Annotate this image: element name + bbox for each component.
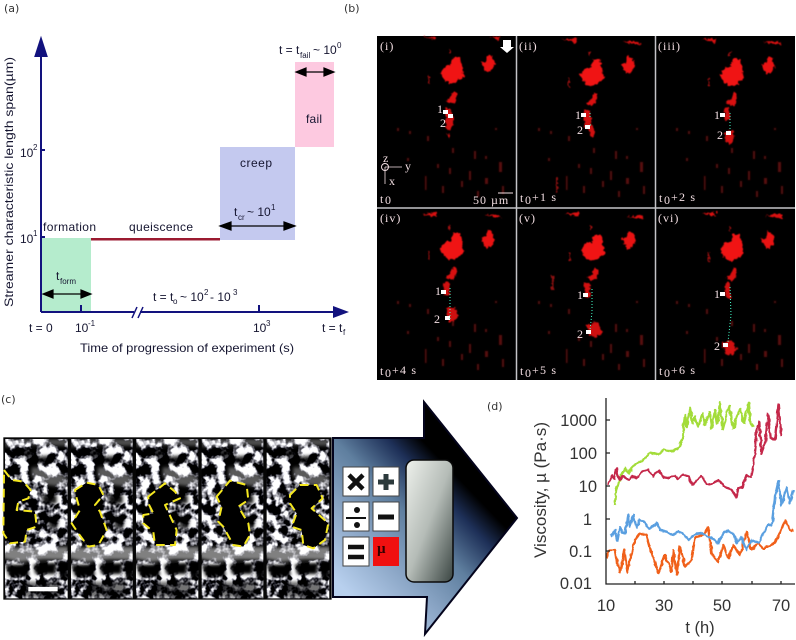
calculator display xyxy=(406,460,453,582)
span arrow: t form xyxy=(43,290,91,298)
frame iii: 2 xyxy=(717,128,723,142)
x tick labels: 3 xyxy=(266,319,271,328)
frame iv xyxy=(380,211,504,380)
y tick labels: 0.1 xyxy=(569,543,592,561)
panel: (a) streamer progression diagram xyxy=(2,2,349,355)
x tick labels: 30 xyxy=(655,597,673,615)
y tick labels: 0.01 xyxy=(560,575,592,593)
x tick labels: 10 xyxy=(253,321,267,335)
frame ii: +1 s xyxy=(532,190,557,204)
span arrow: t fail xyxy=(296,68,334,76)
x tick labels: 10 xyxy=(597,597,615,615)
duration annotations: o xyxy=(173,297,178,306)
series: green xyxy=(615,403,753,505)
y axis title: Streamer characteristic length span(µm) xyxy=(2,57,16,307)
frame i: 1 xyxy=(437,102,443,116)
panel: (d) viscosity chart xyxy=(487,398,795,637)
frame i: x xyxy=(389,174,395,188)
x tick labels xyxy=(29,319,346,337)
frame vi xyxy=(658,211,784,380)
duration annotations: t = t xyxy=(279,43,300,57)
frame iv: +4 s xyxy=(392,363,417,377)
frame iii: t xyxy=(659,191,663,205)
image strip xyxy=(3,437,332,600)
chart axes xyxy=(606,398,795,584)
frame v: 1 xyxy=(577,288,583,302)
y tick labels xyxy=(560,412,597,593)
panel: calculator arrow xyxy=(333,402,517,634)
calculator buttons xyxy=(343,467,399,566)
frame ii xyxy=(519,39,645,207)
x tick labels: t = t xyxy=(322,321,343,335)
y tick labels: 2 xyxy=(33,143,38,152)
duration annotations xyxy=(56,41,342,306)
arrow body xyxy=(333,402,517,634)
y tick labels: 10 xyxy=(20,146,34,160)
frame v: +5 s xyxy=(532,363,557,377)
x axis title: t (h) xyxy=(685,619,715,637)
frame i xyxy=(380,37,514,207)
x axis arrow xyxy=(41,305,349,318)
stage labels: creep xyxy=(240,156,272,170)
frame vi: +6 s xyxy=(671,363,696,377)
frame backdrop xyxy=(377,36,795,380)
duration annotations: 3 xyxy=(233,288,238,297)
frame iii: (iii) xyxy=(658,39,681,53)
x tick labels xyxy=(597,597,790,615)
stage labels xyxy=(43,112,322,234)
y tick labels: 100 xyxy=(569,445,597,463)
frame v: t xyxy=(520,364,524,378)
frame iv: (iv) xyxy=(380,211,401,225)
frame ii: t xyxy=(520,191,524,205)
frame ii: 0 xyxy=(525,193,531,207)
frame vi: (vi) xyxy=(658,211,679,225)
frame ii: 2 xyxy=(577,123,583,137)
x tick labels: 50 xyxy=(713,597,731,615)
panel label a: (a) xyxy=(4,2,19,15)
frame vi: 2 xyxy=(714,339,720,353)
duration annotations: 0 xyxy=(337,41,342,50)
duration annotations: t xyxy=(234,205,238,219)
x tick labels: t = 0 xyxy=(29,321,53,335)
frame iv: t xyxy=(380,364,384,378)
frame vi: 0 xyxy=(664,366,670,380)
frame iv: 1 xyxy=(435,284,441,298)
duration annotations: t = t xyxy=(153,290,174,304)
frame v: (v) xyxy=(519,211,536,225)
frame iv: 2 xyxy=(434,312,440,326)
y tick labels xyxy=(20,143,38,246)
fail stage block xyxy=(295,62,334,147)
x axis title: Time of progression of experiment (s) xyxy=(80,341,294,355)
frame iii xyxy=(658,39,783,207)
panel label d: (d) xyxy=(487,400,503,413)
frame i: t xyxy=(380,192,384,206)
duration annotations: fail xyxy=(300,51,310,60)
frame i: 0 xyxy=(385,193,391,207)
frame i: y xyxy=(405,159,411,173)
span arrow: t cr xyxy=(220,222,295,230)
x tick labels: f xyxy=(343,328,346,337)
frame v: 2 xyxy=(577,327,583,341)
duration annotations: 2 xyxy=(204,288,209,297)
calculator buttons: µ xyxy=(377,541,386,557)
series: blue xyxy=(610,482,793,550)
frame v xyxy=(519,211,645,380)
duration annotations: form xyxy=(60,277,76,286)
duration annotations: cr xyxy=(238,213,245,222)
duration annotations: ~ 10 xyxy=(247,205,271,219)
panel: (c) grayscale image sequence xyxy=(1,393,332,600)
frame i: (i) xyxy=(380,39,394,53)
frame i: 2 xyxy=(440,116,446,130)
viscosity series xyxy=(607,403,793,575)
y tick labels: 1 xyxy=(33,229,38,238)
y tick labels: 1 xyxy=(583,511,592,529)
panel label b: (b) xyxy=(344,2,360,15)
stage labels: fail xyxy=(306,112,322,126)
duration annotations: t xyxy=(56,269,60,283)
stage labels: queiscence xyxy=(129,220,193,234)
frame iii: 0 xyxy=(664,193,670,207)
frame vi: t xyxy=(659,364,663,378)
formation stage block xyxy=(41,238,91,312)
frame dividers xyxy=(377,36,795,380)
frame v: 0 xyxy=(525,366,531,380)
frame i: 50 µm xyxy=(473,193,509,207)
frame iii: 1 xyxy=(714,108,720,122)
frame ii: 1 xyxy=(575,108,581,122)
frame iii: +2 s xyxy=(671,190,696,204)
frame ii: (ii) xyxy=(519,39,538,53)
x tick labels: -1 xyxy=(88,319,96,328)
panel: (b) microscopy time series xyxy=(344,2,795,380)
quiescence line xyxy=(91,238,220,240)
y tick labels: 10 xyxy=(579,478,597,496)
panel label c: (c) xyxy=(1,393,16,406)
frame i: z xyxy=(383,151,388,165)
y axis arrow xyxy=(36,39,46,312)
duration annotations: ~ 10 xyxy=(180,290,204,304)
frame iv: 0 xyxy=(385,366,391,380)
y tick labels: 10 xyxy=(20,232,34,246)
y axis title: Viscosity, µ (Pa·s) xyxy=(532,422,550,558)
frame vi: 1 xyxy=(714,287,720,301)
streamer outlines xyxy=(3,470,328,548)
duration annotations: ~ 10 xyxy=(313,43,337,57)
series: orange xyxy=(607,520,793,575)
duration annotations: 1 xyxy=(271,203,276,212)
x tick labels: 10 xyxy=(75,321,89,335)
stage labels: formation xyxy=(43,220,96,234)
series: crimson xyxy=(608,405,782,497)
y tick labels: 1000 xyxy=(560,412,597,430)
duration annotations: - 10 xyxy=(210,290,231,304)
creep stage block xyxy=(220,147,295,240)
x tick labels: 70 xyxy=(772,597,790,615)
